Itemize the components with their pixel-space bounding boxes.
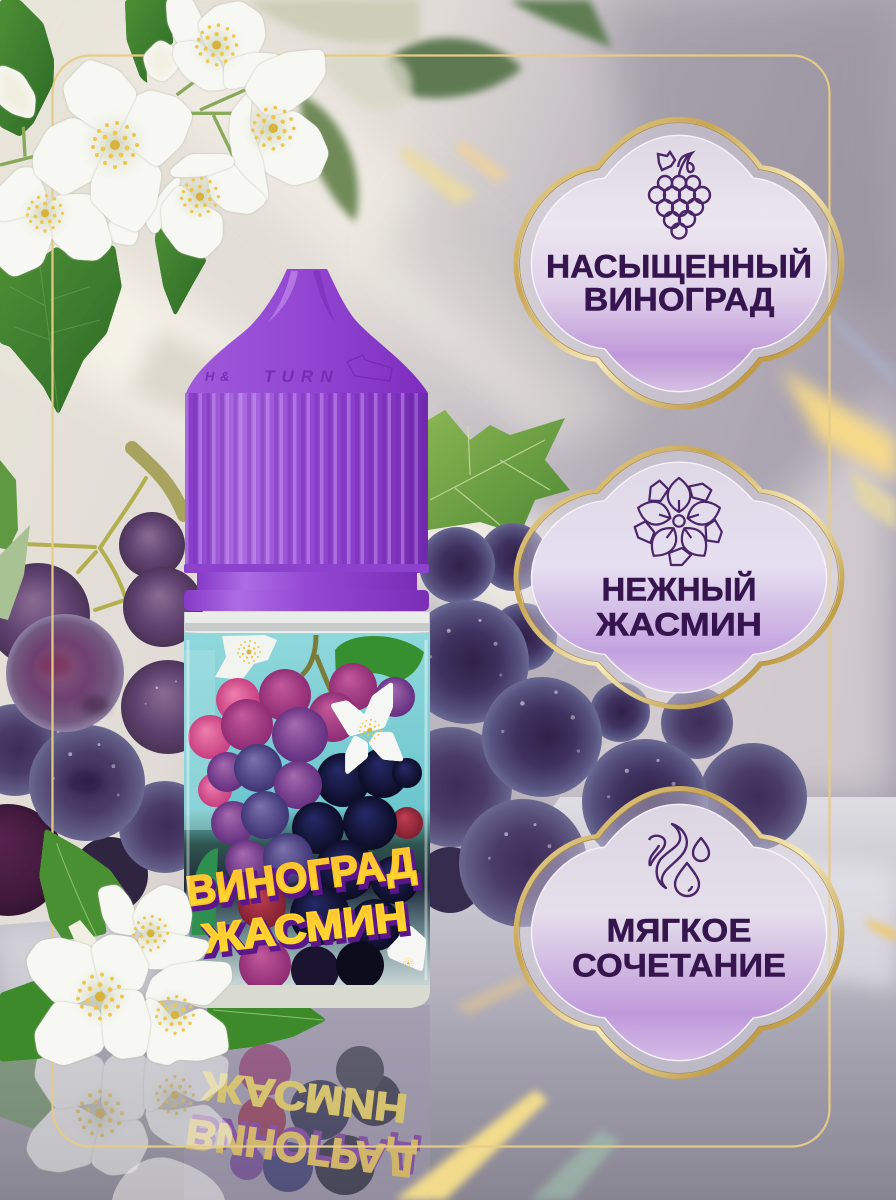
- reflection of bottle on table: ВИНОГРАД: [183, 1110, 418, 1187]
- badge: tender jasmine: ЖАСМИН: [595, 606, 762, 642]
- jasmine flowers top left: [0, 0, 327, 275]
- flower: [147, 157, 265, 257]
- product name on label: ВИНОГРАД: [186, 842, 421, 919]
- embossed cap text: [205, 355, 392, 386]
- bud: [0, 67, 33, 117]
- product label with grapes, jasmine and name: ВИНОГРАД: [183, 838, 418, 915]
- badge: soft combination: СОЧЕТАНИЕ: [572, 948, 786, 984]
- flower: [35, 62, 191, 230]
- icon: aroma swirl and drops: [649, 824, 709, 896]
- blurred background foliage: [250, 0, 612, 222]
- badge text: НЕЖНЫЙ: [602, 572, 756, 608]
- flower: [28, 937, 148, 1063]
- badge: tender jasmine: [516, 448, 842, 707]
- reflection of bottle on table: [183, 1005, 430, 1200]
- jasmine flowers bottom left: [28, 887, 230, 1063]
- flower: [100, 887, 208, 967]
- bottom leaves: [0, 828, 327, 1062]
- rainbow light spots on wall: [400, 140, 896, 530]
- grape leaf behind bottle: [428, 410, 570, 535]
- embossed cap text: TURN: [264, 367, 334, 386]
- upper left leaves: [0, 0, 245, 415]
- grape cluster left: [0, 448, 215, 916]
- ribbed cap: [185, 393, 428, 568]
- reflection of bottle on table: ЖАСМИН: [199, 1063, 410, 1130]
- badge text: НАСЫЩЕННЫЙ: [546, 248, 812, 284]
- lower reflected petals: [112, 1157, 225, 1200]
- badge text: МЯГКОЕ: [606, 912, 752, 948]
- product label with grapes, jasmine and name: ЖАСМИН: [202, 897, 413, 966]
- rainbow light streaks on table: [395, 918, 896, 1200]
- product label with grapes, jasmine and name: [183, 633, 430, 994]
- flower: [168, 0, 280, 88]
- reflection of jasmine flowers on table: [0, 1047, 230, 1173]
- grape stem: [0, 448, 184, 615]
- cap tip cone: [186, 269, 428, 393]
- icon: jasmine flower: [634, 478, 725, 565]
- flower: [0, 170, 137, 275]
- bud: [145, 42, 177, 80]
- side leaves left: [0, 460, 30, 620]
- product bottle: [183, 269, 430, 1008]
- grape cluster right: [392, 410, 807, 927]
- badge: rich grape: ВИНОГРАД: [584, 282, 775, 318]
- flower: [232, 52, 327, 200]
- glossy table surface: [0, 797, 896, 1200]
- cap collar: [184, 564, 429, 611]
- glass body: [184, 612, 430, 1008]
- flower: [147, 963, 230, 1063]
- badge: soft combination: [516, 788, 842, 1076]
- gold frame: [52, 56, 830, 1146]
- glass edge highlights: [188, 640, 426, 980]
- product label with grapes, jasmine and name: ЖАСМИН: [199, 893, 410, 962]
- reflection of bottle on table: ВИНОГРАД: [186, 1106, 421, 1183]
- badge: rich grape: [516, 120, 842, 408]
- glass bottom: [184, 985, 430, 1008]
- bud: [68, 920, 97, 950]
- embossed cap text: H &: [205, 369, 230, 384]
- icon: grapes: [649, 152, 710, 238]
